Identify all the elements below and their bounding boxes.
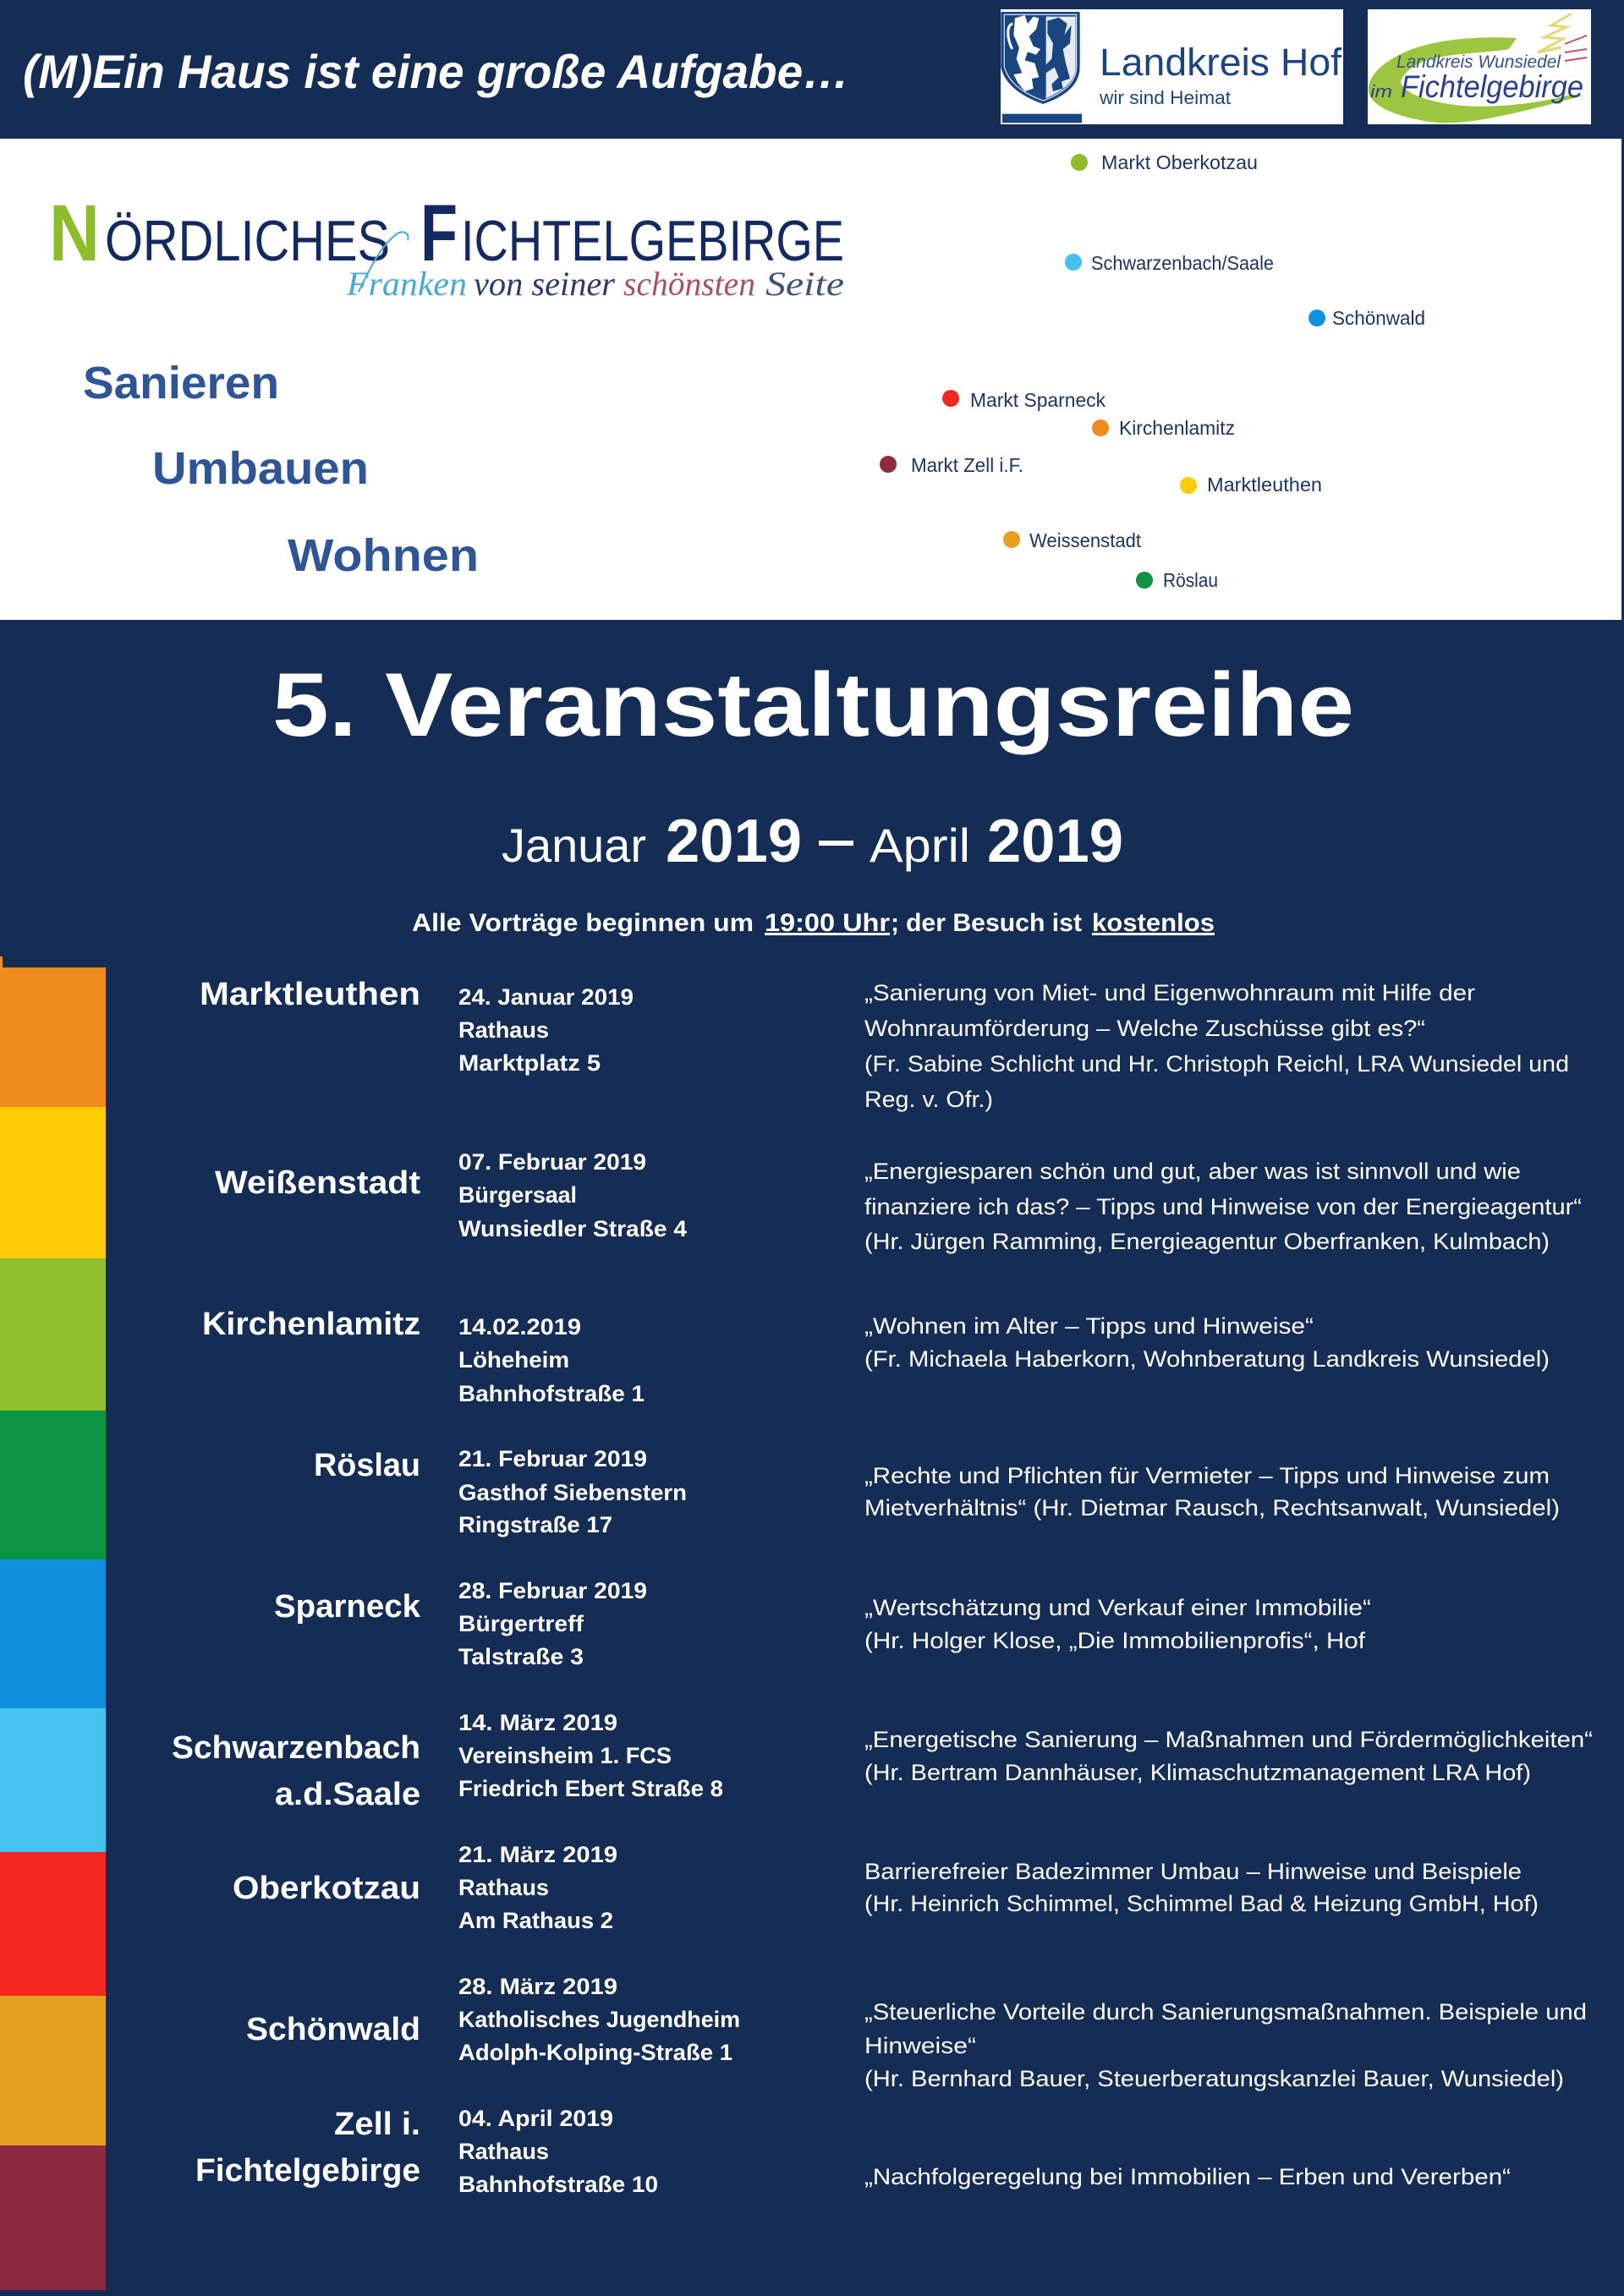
event: Zell i. Fichtelgebirge <box>195 2106 1511 2197</box>
event: Schwarzenbach a.d.Saale: „Energetische Sanierung – Maßnahmen und Fördermöglichkeiten“ <box>864 1727 1593 1752</box>
header bar <box>0 0 1624 139</box>
event: Röslau: Röslau <box>314 1448 420 1483</box>
note: start time and free admission: Alle Vorträge beginnen um <box>412 909 754 937</box>
event: Schönwald: Schönwald <box>246 2012 420 2047</box>
icon: fir tree <box>1538 14 1587 61</box>
event: Marktleuthen: (Fr. Sabine Schlicht und Hr. Christoph Reichl, LRA Wunsiedel und <box>864 1051 1569 1077</box>
slogan words <box>83 358 479 581</box>
note: start time and free admission <box>412 909 1215 937</box>
event: Röslau: Ringstraße 17 <box>458 1512 612 1537</box>
event: Zell i. Fichtelgebirge: „Nachfolgeregelung bei Immobilien – Erben und Vererben“ <box>864 2164 1511 2189</box>
event: Oberkotzau: Am Rathaus 2 <box>458 1908 613 1933</box>
event: Sparneck: Sparneck <box>274 1589 421 1625</box>
note: start time and free admission: ; <box>891 909 899 937</box>
event: Schönwald: 28. März 2019 <box>458 1974 617 1999</box>
event: Zell i. Fichtelgebirge: Rathaus <box>458 2139 549 2164</box>
logo tagline: Seite <box>765 265 844 303</box>
event: Weißenstadt: (Hr. Jürgen Ramming, Energieagentur Oberfranken, Kulmbach) <box>864 1229 1550 1254</box>
note: start time and free admission: kostenlos <box>1092 909 1215 937</box>
event: Schönwald <box>246 1974 1587 2091</box>
event: Röslau: Mietverhältnis“ (Hr. Dietmar Rausch, Rechtsanwalt, Wunsiedel) <box>864 1495 1560 1521</box>
logo: Nördliches Fichtelgebirge: ICHTELGEBIRGE <box>461 209 844 273</box>
date range: 2019 <box>987 808 1123 875</box>
event: Schönwald: Adolph-Kolping-Straße 1 <box>458 2040 732 2065</box>
logo: Landkreis Hof: Landkreis Hof <box>1100 41 1342 84</box>
event: Marktleuthen: Marktplatz 5 <box>458 1050 601 1076</box>
event: Kirchenlamitz: Löheheim <box>458 1347 569 1373</box>
map of municipalities: Kirchenlamitz <box>1119 417 1235 439</box>
event: Kirchenlamitz: (Fr. Michaela Haberkorn, Wohnberatung Landkreis Wunsiedel) <box>864 1346 1550 1372</box>
event: Weißenstadt: 07. Februar 2019 <box>458 1149 646 1175</box>
event: Röslau: „Rechte und Pflichten für Vermieter – Tipps und Hinweise zum <box>864 1463 1550 1488</box>
map of municipalities <box>880 151 1425 591</box>
logo: Nördliches Fichtelgebirge: ÖRDLICHES <box>105 209 390 273</box>
event: Marktleuthen: 24. Januar 2019 <box>458 984 634 1010</box>
note: start time and free admission: 19:00 Uhr <box>765 909 890 937</box>
event: Weißenstadt: „Energiesparen schön und gut, aber was ist sinnvoll und wie <box>864 1159 1521 1184</box>
main heading: 5. Veranstaltungsreihe <box>272 654 1354 755</box>
map of municipalities: Röslau <box>1163 569 1218 591</box>
date range: 2019 <box>666 808 802 875</box>
event: Röslau: Gasthof Siebenstern <box>458 1480 687 1505</box>
event: Schönwald: (Hr. Bernhard Bauer, Steuerberatungskanzlei Bauer, Wunsiedel) <box>864 2066 1564 2091</box>
event: Schönwald: Katholisches Jugendheim <box>458 2007 740 2032</box>
event: Oberkotzau: 21. März 2019 <box>458 1842 617 1867</box>
map of municipalities: Markt Zell i.F. <box>911 454 1023 476</box>
icon: green swoosh <box>1369 37 1583 123</box>
map of municipalities: Weissenstadt <box>1029 529 1142 551</box>
event: Kirchenlamitz: „Wohnen im Alter – Tipps und Hinweise“ <box>864 1313 1314 1339</box>
event: Marktleuthen: Reg. v. Ofr.) <box>864 1087 993 1112</box>
event: Oberkotzau <box>233 1842 1539 1933</box>
event: Schwarzenbach a.d.Saale <box>172 1710 1593 1812</box>
note: start time and free admission: der Besuch ist <box>906 909 1082 937</box>
event: Schwarzenbach a.d.Saale: Friedrich Ebert Straße 8 <box>458 1776 723 1801</box>
event: Oberkotzau: (Hr. Heinrich Schimmel, Schimmel Bad & Heizung GmbH, Hof) <box>864 1891 1539 1916</box>
logo tagline <box>346 232 844 303</box>
logo: Nördliches Fichtelgebirge: F <box>420 189 458 278</box>
map of municipalities: Marktleuthen <box>1207 474 1322 496</box>
event: Zell i. Fichtelgebirge: Fichtelgebirge <box>195 2153 420 2189</box>
event: Oberkotzau: Rathaus <box>458 1875 549 1900</box>
event: Zell i. Fichtelgebirge: Bahnhofstraße 10 <box>458 2172 658 2197</box>
date range: April <box>870 819 970 872</box>
slogan words: Wohnen <box>288 530 479 581</box>
event: Schönwald: Hinweise“ <box>864 2033 976 2058</box>
event: Marktleuthen: Wohnraumförderung – Welche Zuschüsse gibt es?“ <box>864 1016 1425 1041</box>
event: Schwarzenbach a.d.Saale: 14. März 2019 <box>458 1710 617 1735</box>
event: Oberkotzau: Barrierefreier Badezimmer Umbau – Hinweise und Beispiele <box>864 1859 1522 1884</box>
logo tagline: von seiner <box>474 265 615 303</box>
event: Schwarzenbach a.d.Saale: a.d.Saale <box>275 1777 420 1812</box>
event: Sparneck: Talstraße 3 <box>458 1644 584 1669</box>
logo: Landkreis Wunsiedel im Fichtelgebirge <box>1368 9 1591 124</box>
event: Röslau: 21. Februar 2019 <box>458 1446 647 1471</box>
map of municipalities: Schönwald <box>1332 307 1425 329</box>
event: Weißenstadt: finanziere ich das? – Tipps und Hinweise von der Energieagentur“ <box>864 1194 1582 1219</box>
event: Sparneck: (Hr. Holger Klose, „Die Immobilienprofis“, Hof <box>864 1628 1366 1653</box>
header title: (M)Ein Haus ist eine große Aufgabe… <box>23 45 849 98</box>
event: Kirchenlamitz: Kirchenlamitz <box>202 1307 420 1342</box>
white intro panel <box>0 139 1621 620</box>
event: Kirchenlamitz: 14.02.2019 <box>458 1314 581 1340</box>
event: Schwarzenbach a.d.Saale: Vereinsheim 1. FCS <box>458 1743 672 1768</box>
icon: coat of arms shield <box>1001 12 1082 123</box>
logo: Landkreis Hof: wir sind Heimat <box>1099 87 1231 108</box>
event: Marktleuthen: Marktleuthen <box>200 977 420 1012</box>
event: Sparneck: Bürgertreff <box>458 1611 584 1636</box>
logo: Landkreis Wunsiedel im Fichtelgebirge: Landkreis Wunsiedel <box>1396 52 1561 72</box>
event: Weißenstadt: Bürgersaal <box>458 1182 577 1208</box>
event: Marktleuthen: „Sanierung von Miet- und Eigenwohnraum mit Hilfe der <box>864 980 1475 1006</box>
event: Schönwald: „Steuerliche Vorteile durch Sanierungsmaßnahmen. Beispiele und <box>864 1999 1587 2025</box>
logo: Nördliches Fichtelgebirge <box>49 189 844 303</box>
date range <box>502 808 1123 875</box>
event: Kirchenlamitz <box>202 1307 1550 1406</box>
event: Röslau <box>314 1446 1560 1537</box>
event: Schwarzenbach a.d.Saale: (Hr. Bertram Dannhäuser, Klimaschutzmanagement LRA Hof) <box>864 1760 1531 1785</box>
event: Zell i. Fichtelgebirge: Zell i. <box>334 2107 420 2142</box>
logo: Landkreis Hof <box>1001 9 1343 124</box>
event: Zell i. Fichtelgebirge: 04. April 2019 <box>458 2106 613 2131</box>
colour bar column <box>0 956 106 2290</box>
event: Oberkotzau: Oberkotzau <box>233 1871 420 1906</box>
map of municipalities: Markt Oberkotzau <box>1101 151 1258 173</box>
date range: Januar <box>502 819 646 872</box>
event: Weißenstadt: Weißenstadt <box>215 1165 420 1201</box>
event: Schwarzenbach a.d.Saale: Schwarzenbach <box>172 1730 420 1766</box>
logo: Nördliches Fichtelgebirge: N <box>49 189 100 278</box>
event: Marktleuthen <box>200 977 1569 1112</box>
event: Weißenstadt <box>215 1149 1582 1254</box>
map of municipalities: Markt Sparneck <box>970 389 1106 411</box>
event: Sparneck: 28. Februar 2019 <box>458 1578 647 1603</box>
slogan words: Umbauen <box>152 443 369 494</box>
event: Sparneck <box>274 1578 1371 1669</box>
slogan words: Sanieren <box>83 358 279 408</box>
logo: Landkreis Wunsiedel im Fichtelgebirge: Fichtelgebirge <box>1401 69 1583 104</box>
event: Kirchenlamitz: Bahnhofstraße 1 <box>458 1381 645 1406</box>
map of municipalities: Schwarzenbach/Saale <box>1091 252 1274 274</box>
logo: Landkreis Wunsiedel im Fichtelgebirge: im <box>1370 83 1392 101</box>
logo tagline: schönsten <box>623 265 755 303</box>
event: Marktleuthen: Rathaus <box>458 1017 549 1043</box>
logo tagline: Franken <box>346 265 467 303</box>
event: Sparneck: „Wertschätzung und Verkauf einer Immobilie“ <box>864 1595 1371 1620</box>
event: Weißenstadt: Wunsiedler Straße 4 <box>458 1216 687 1241</box>
